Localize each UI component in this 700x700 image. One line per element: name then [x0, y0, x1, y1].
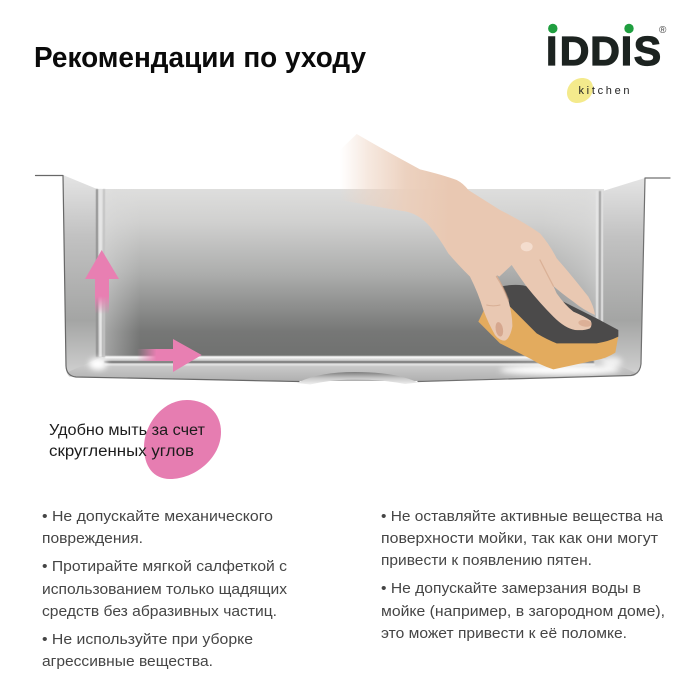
floor glow [89, 357, 622, 375]
callout text [49, 422, 205, 460]
sponge body [478, 307, 618, 369]
callout text: скругленных углов [49, 443, 194, 460]
text block: left care tips: • Не используйте при уборке [42, 632, 253, 648]
logo registered mark: ® [659, 25, 667, 36]
logo yellow blob [567, 78, 593, 103]
sink floor lip [68, 357, 636, 381]
text block: left care tips: • Протирайте мягкой салфеткой с [42, 559, 287, 575]
hand with sponge [340, 134, 618, 369]
text block: right care tips [381, 509, 665, 642]
logo wordmark: IDDIS [546, 28, 661, 74]
logo kitchen label: kitchen [578, 85, 630, 97]
drain cut-out [297, 372, 418, 384]
arrow: right [137, 339, 202, 372]
floor highlights [104, 356, 600, 366]
callout text: Удобно мыть за счет [49, 422, 205, 439]
sink outline and lips [36, 176, 670, 382]
text block: right care tips: мойке (например, в загородном доме), [381, 604, 665, 620]
title: Рекомендации по уходу [34, 42, 366, 74]
logo: IDDIS kitchen [546, 24, 667, 103]
callout: rounded corners [49, 400, 221, 479]
sink right side wall [597, 178, 645, 376]
sink illustration [36, 175, 670, 384]
sink back wall [97, 189, 604, 357]
text block: left care tips: повреждения. [42, 531, 143, 547]
text block: right care tips: • Не допускайте замерзания воды в [381, 581, 641, 597]
text block: left care tips: агрессивные вещества. [42, 654, 213, 670]
text block: left care tips: • Не допускайте механического [42, 509, 273, 525]
arrow: up [85, 250, 119, 314]
text block: right care tips: это может привести к её поломке. [381, 626, 627, 642]
sink back wall corner highlights [97, 189, 604, 357]
text block: left care tips: средств без абразивных частиц. [42, 604, 277, 620]
hand and arm silhouette [340, 134, 595, 341]
hand shading [487, 260, 553, 306]
text block: left care tips: использованием только щадящих [42, 582, 288, 598]
sponge scrub pad [500, 285, 618, 343]
finger nail [578, 319, 592, 328]
thumb nail [494, 321, 504, 337]
text block: right care tips: привести к появлению пятен. [381, 553, 592, 569]
knuckle highlight [521, 242, 533, 251]
sink left side wall [63, 175, 105, 377]
callout pink blob [144, 400, 221, 479]
logo green dots [548, 24, 634, 33]
text block: right care tips: поверхности мойки, так как они могут [381, 531, 658, 547]
text block: right care tips: • Не оставляйте активные вещества на [381, 509, 664, 525]
text block: left care tips [42, 509, 288, 670]
sink corner seams [96, 189, 603, 357]
